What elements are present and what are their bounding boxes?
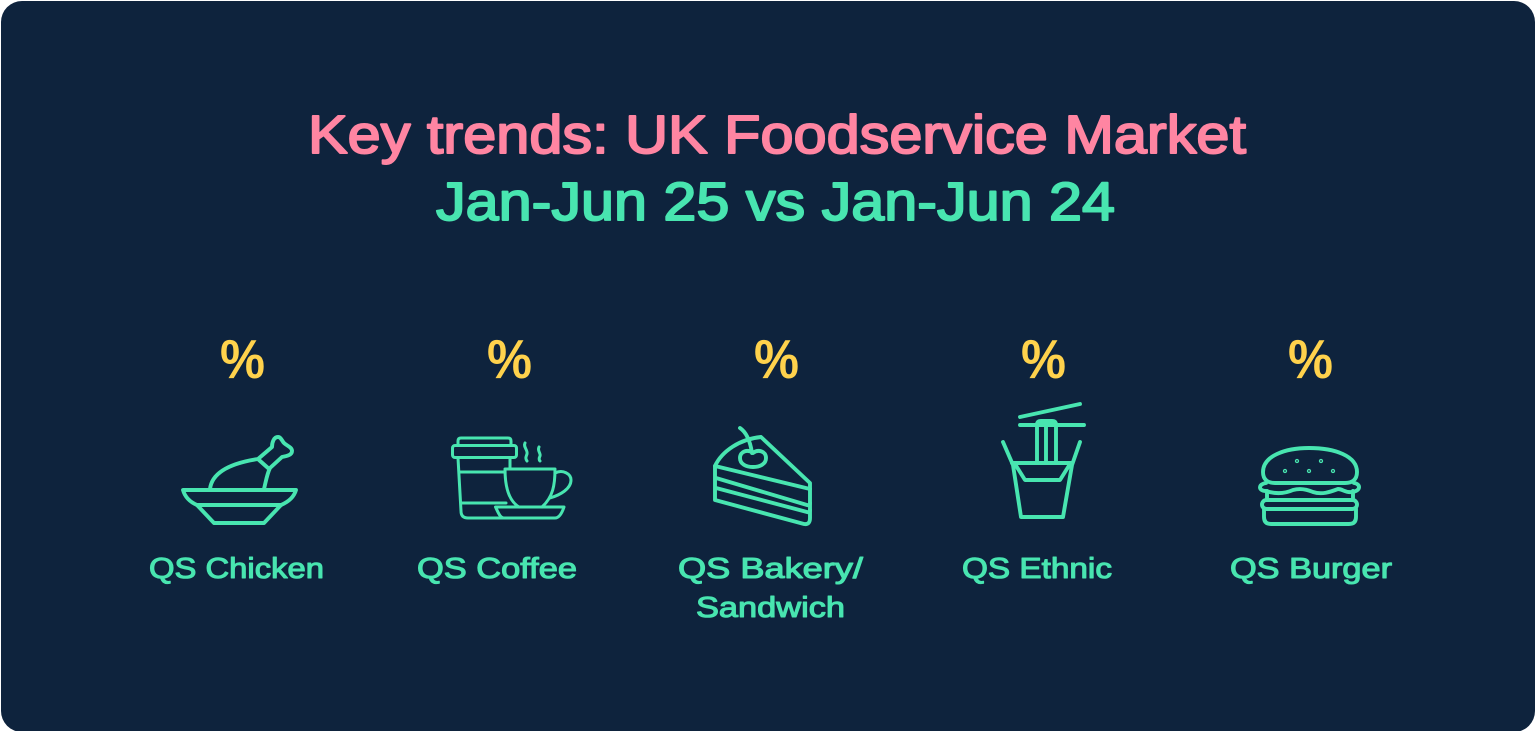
percent value: %	[1288, 328, 1333, 390]
item: QS Ethnic	[962, 328, 1112, 585]
percent value: %	[220, 328, 265, 390]
title line 2: Jan-Jun 25 vs Jan-Jun 24	[436, 172, 1115, 232]
item: QS Burger	[1230, 328, 1392, 585]
icon: chicken on a plate	[183, 437, 296, 523]
percent value: %	[487, 328, 532, 390]
percent value: %	[754, 328, 799, 390]
label	[678, 553, 864, 624]
title	[308, 105, 1246, 232]
icon: noodle box with chopsticks	[1003, 404, 1084, 517]
icon: takeaway cup and coffee cup	[452, 438, 571, 518]
percent value: %	[1021, 328, 1066, 390]
label: QS Bakery/	[678, 553, 864, 585]
label: QS Coffee	[417, 553, 577, 585]
item: QS Coffee	[417, 328, 577, 585]
icon: burger	[1260, 448, 1359, 524]
label: QS Chicken	[149, 553, 324, 585]
icon: slice of cake with cherry	[715, 428, 810, 524]
item: QS Bakery/Sandwich	[678, 328, 864, 624]
item: QS Chicken	[149, 328, 324, 585]
title line 1: Key trends: UK Foodservice Market	[308, 105, 1246, 165]
label: QS Ethnic	[962, 553, 1112, 585]
label: Sandwich	[696, 592, 845, 624]
label: QS Burger	[1230, 553, 1392, 585]
